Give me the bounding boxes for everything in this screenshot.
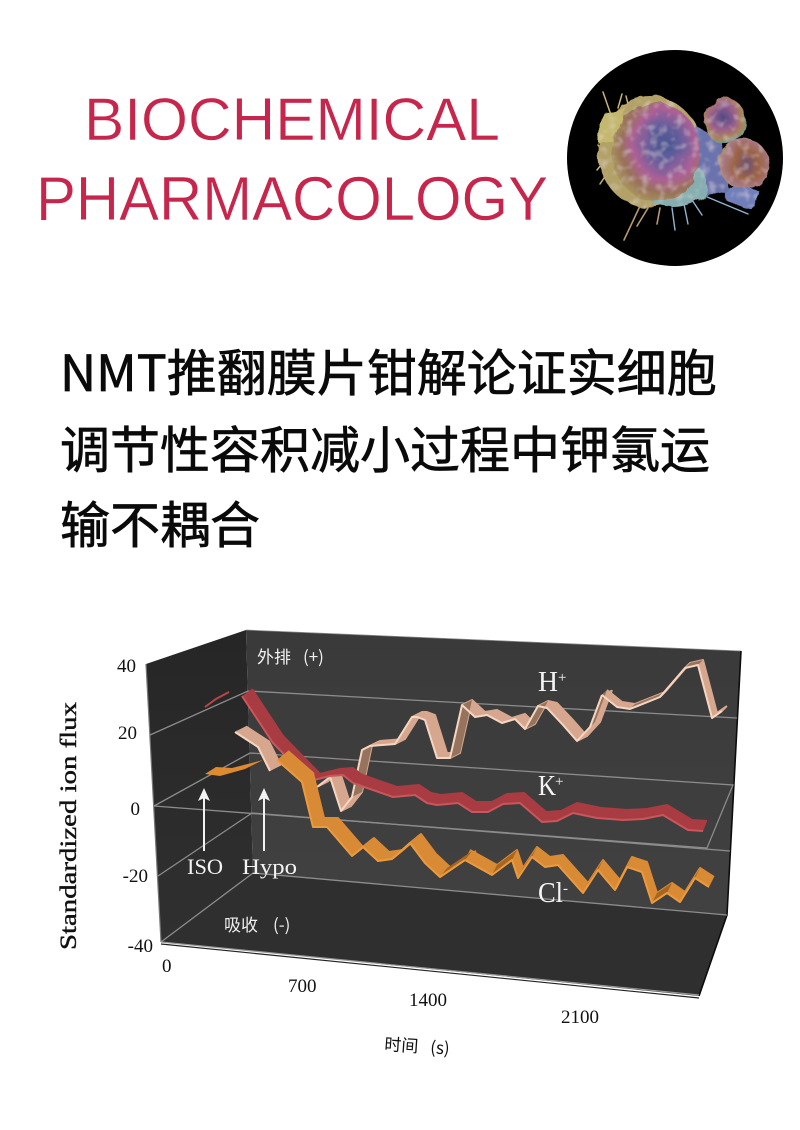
label: efflux: (+) [303,643,324,668]
x axis tick labels: 1400 [409,990,447,1011]
title [60,334,717,558]
left wall [146,630,253,942]
y axis tick labels [117,656,153,957]
series labels: ISO [187,854,223,879]
series labels: K [538,770,556,802]
chart frame edges [146,630,741,998]
logo: journal name [36,86,548,234]
x axis tick labels: 2100 [561,1007,599,1028]
label: uptake: 吸收 [224,911,258,936]
logo: journal name: BIOCHEMICAL [84,86,500,153]
series: K+ fragment [205,692,229,707]
arrow: Hypo [258,788,270,851]
title: 调节性容积减小过程中钾氯运 [60,411,710,483]
series labels: Cl [538,877,563,909]
title: 输不耦合 [60,486,260,558]
title: NMT推翻膜片钳解论证实细胞 [60,334,717,406]
y axis tick labels: -40 [128,936,153,957]
y axis tick labels: -20 [123,866,148,887]
arrow: ISO [198,788,210,851]
series labels: Hypo [242,854,297,879]
series labels: H [538,666,558,698]
x axis title: 时间 [384,1030,419,1057]
x axis title: (s) [430,1033,451,1060]
series labels: + [555,774,563,790]
y axis tick labels: 40 [117,656,136,677]
series labels [187,666,568,909]
series labels: - [563,881,568,897]
label: efflux: 外排 [257,643,291,668]
x axis tick labels: 0 [162,956,172,977]
series: Cl- start segment [205,760,263,776]
grid lines [150,691,737,942]
chart: 3D standardized ion flux [146,630,741,998]
x axis tick labels [162,956,599,1028]
series: Cl- ribbon [277,751,714,903]
y axis title: Standardized ion flux [56,701,81,950]
series labels: + [558,670,566,686]
icon: cell micrograph in circle [567,50,783,266]
x axis tick labels: 700 [288,976,316,997]
y axis tick labels: 20 [118,723,137,744]
logo: journal name: PHARMACOLOGY [36,165,548,234]
floor [161,873,727,996]
series: K+ ribbon [242,689,707,831]
back wall [246,630,741,915]
label: uptake: (-) [273,911,290,936]
series: H+ ribbon [235,660,727,811]
y axis tick labels: 0 [130,799,140,820]
